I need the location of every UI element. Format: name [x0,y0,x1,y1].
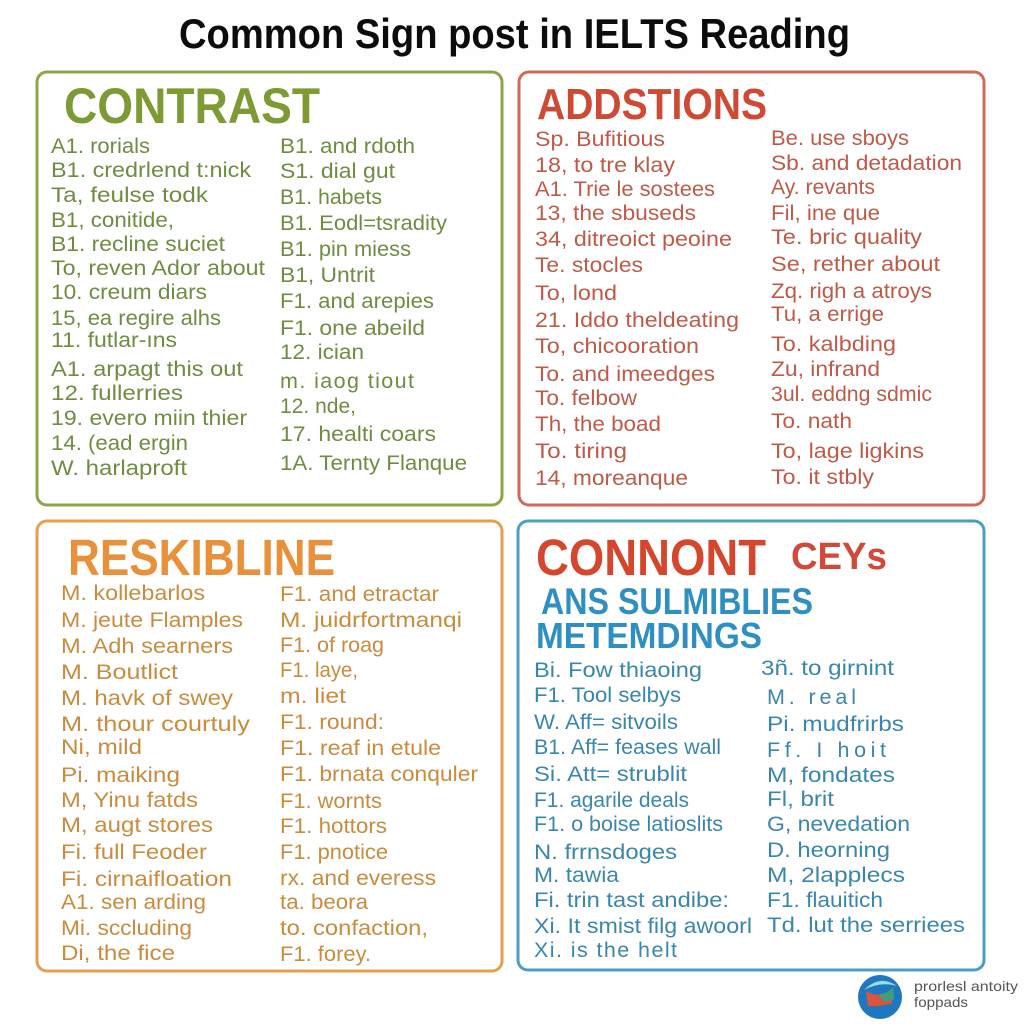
list: contrast left column: 19. evero miin thier [51,406,247,430]
list: resemblance left column: M. Adh searners [61,634,233,658]
list: connectives left column [534,658,752,962]
list: connectives left column: M. tawia [534,863,619,887]
list: contrast right column: B1. and rdoth [280,134,415,158]
list: contrast right column: B1. Eodl=tsradity [280,211,447,235]
list: additions left column: Sp. Bufitious [535,127,665,151]
list: resemblance right column [280,582,478,966]
heading: additions: ADDSTIONS [537,80,767,129]
list: resemblance left column: M. Boutlict [61,660,178,684]
list: additions right column [771,126,962,489]
list: connectives right column: D. heorning [767,838,890,862]
list: connectives right column: Pi. mudfrirbs [767,712,904,736]
panel: contrast [37,72,502,505]
list: additions right column: Te. bric quality [771,225,922,249]
list: resemblance right column: F1. forey. [280,942,371,966]
heading: metemdings: METEMDINGS [536,615,762,656]
list: connectives right column: Td. lut the serriees [767,913,965,937]
list: resemblance left column: M. jeute Flamples [61,608,243,632]
list: contrast left column: B1, conitide, [51,208,174,232]
list: additions right column: To. kalbding [771,332,896,356]
list: contrast right column: 12. ician [280,340,364,364]
list: resemblance right column: F1. laye, [280,658,358,682]
list: resemblance right column: F1. and etractar [280,582,439,606]
list: contrast left column: 14. (ead ergin [51,431,188,455]
list: contrast right column: B1. pin miess [280,237,411,261]
list: resemblance right column: m. liet [280,684,346,708]
heading: ans sulmiblies: ANS SULMIBLIES [541,581,813,622]
list: connectives left column: Si. Att= strublit [534,762,687,786]
list: additions right column: Se, rether about [771,252,940,276]
list: resemblance left column: M, Yinu fatds [61,788,198,812]
list: additions right column: Fil, ine que [771,201,880,225]
list: additions left column: To. tiring [535,439,627,463]
list: resemblance left column: Mi. sccluding [61,916,192,940]
list: resemblance right column: ta. beora [280,890,368,914]
list: connectives right column: M. real [767,685,856,709]
list: resemblance left column: M. kollebarlos [61,581,205,605]
list: additions left column: To. and imeedges [535,362,715,386]
list: resemblance left column: Fi. full Feoder [61,840,207,864]
list: resemblance right column: to. confaction, [280,916,428,940]
logo text [914,978,1018,1010]
list: resemblance right column: F1. pnotice [280,840,388,864]
list: contrast left column: W. harlaproft [51,456,187,480]
list: resemblance right column: M. juidrfortmanqi [280,608,462,632]
list: connectives left column: Xi. is the helt [534,938,677,962]
list: connectives left column: Xi. It smist filg awoorl [534,914,752,938]
list: contrast right column: F1. one abeild [280,316,425,340]
list: additions right column: Be. use sboys [771,126,909,150]
list: additions right column: Zq. righ a atroys [771,279,932,303]
list: connectives right column: Ff. I hoit [767,738,886,762]
list: resemblance right column: F1. of roag [280,633,384,657]
list: resemblance left column: M. havk of swey [61,686,233,710]
heading: ceys: CEYs [791,536,887,578]
list: resemblance left column: Fi. cirnaifloation [61,867,232,891]
title: Common Sign post in IELTS Reading [179,10,850,57]
list: connectives left column: F1. agarile deals [534,788,689,812]
list: contrast left column: Ta, feulse todk [51,183,208,207]
list: contrast right column: 17. healti coars [280,422,436,446]
list: contrast right column: B1. habets [280,185,382,209]
list: additions right column: To, lage ligkins [771,439,924,463]
list: contrast left column: B1. credrlend t:nick [51,158,251,182]
list: connectives right column: 3ñ. to girnint [761,656,894,680]
list: additions right column: Tu, a errige [771,302,884,326]
heading: resemblance: RESKIBLINE [68,529,335,586]
panel: connectives [518,521,984,970]
logo text: prorlesl antoity [914,978,1018,994]
list: additions left column: A1. Trie le sostees [535,177,715,201]
list: connectives left column: B1. Aff= feases wall [534,735,721,759]
list: connectives right column [761,656,965,937]
list: resemblance right column: F1. wornts [280,789,382,813]
list: additions left column: 14, moreanque [535,466,688,490]
list: connectives right column: G, nevedation [767,812,910,836]
list: connectives right column: M, 2lapplecs [767,863,905,887]
list: connectives right column: M, fondates [767,763,895,787]
list: contrast right column: B1, Untrit [280,263,375,287]
list: contrast left column: 10. creum diars [51,280,207,304]
list: additions left column: To, lond [535,281,617,305]
list: connectives left column: F1. o boise latioslits [534,812,723,836]
panel: resemblance [37,521,502,971]
list: contrast right column: m. iaog tiout [280,369,414,393]
list: contrast left column: B1. recline suciet [51,232,225,256]
icon: globe logo [858,975,902,1019]
list: resemblance left column: M. thour courtuly [61,712,250,736]
list: additions left column: Te. stocles [535,253,643,277]
list: connectives right column: F1. flauitich [767,888,883,912]
panel: additions [519,72,984,505]
list: resemblance right column: rx. and everess [280,866,436,890]
list: connectives left column: F1. Tool selbys [534,683,681,707]
list: resemblance left column: Ni, mild [61,735,142,759]
list: resemblance left column: M, augt stores [61,813,213,837]
list: contrast right column: F1. and arepies [280,289,434,313]
list: resemblance left column [61,581,250,965]
list: resemblance right column: F1. brnata conquler [280,762,478,786]
list: contrast left column: A1. rorials [51,134,150,158]
list: connectives left column: N. frrnsdoges [534,840,677,864]
logo [858,975,1018,1019]
list: contrast right column: 12. nde, [280,394,356,418]
list: contrast right column: 1A. Ternty Flanque [280,451,467,475]
list: connectives right column: Fl, brit [767,787,834,811]
list: additions left column: 34, ditreoict peoine [535,227,732,251]
heading: connont: CONNONT [536,529,766,586]
list: connectives left column: W. Aff= sitvoils [534,710,678,734]
heading: contrast: CONTRAST [64,78,320,134]
list: contrast left column: 12. fullerries [51,381,183,405]
list: resemblance left column: Pi. maiking [61,763,180,787]
list: contrast left column [51,134,265,480]
list: additions left column: 18, to tre klay [535,153,675,177]
list: additions right column: To. it stbly [771,465,874,489]
list: additions left column: Th, the boad [535,412,661,436]
list: resemblance right column: F1. round: [280,710,384,734]
logo text: foppads [914,994,968,1010]
list: resemblance left column: A1. sen arding [61,890,206,914]
list: contrast left column: A1. arpagt this out [51,357,243,381]
list: additions left column [535,127,739,490]
list: additions left column: 21. Iddo theldeating [535,308,739,332]
list: contrast left column: To, reven Ador about [51,256,265,280]
list: resemblance right column: F1. hottors [280,814,387,838]
list: resemblance left column: Di, the fice [61,941,175,965]
list: contrast left column: 11. futlar-ıns [51,328,177,352]
list: additions right column: 3ul. eddng sdmic [771,382,932,406]
list: additions left column: To, chicooration [535,334,699,358]
list: contrast right column: S1. dial gut [280,159,395,183]
list: additions right column: To. nath [771,409,852,433]
list: additions right column: Ay. revants [771,175,875,199]
list: connectives left column: Fi. trin tast andibe: [534,888,729,912]
list: additions left column: 13, the sbuseds [535,201,696,225]
list: resemblance right column: F1. reaf in etule [280,736,441,760]
list: additions left column: To. felbow [535,386,637,410]
list: connectives left column: Bi. Fow thiaoing [534,658,702,682]
list: additions right column: Zu, infrand [771,357,880,381]
list: additions right column: Sb. and detadation [771,151,962,175]
list: contrast right column [280,134,467,475]
list: contrast left column: 15, ea regire alhs [51,306,221,330]
